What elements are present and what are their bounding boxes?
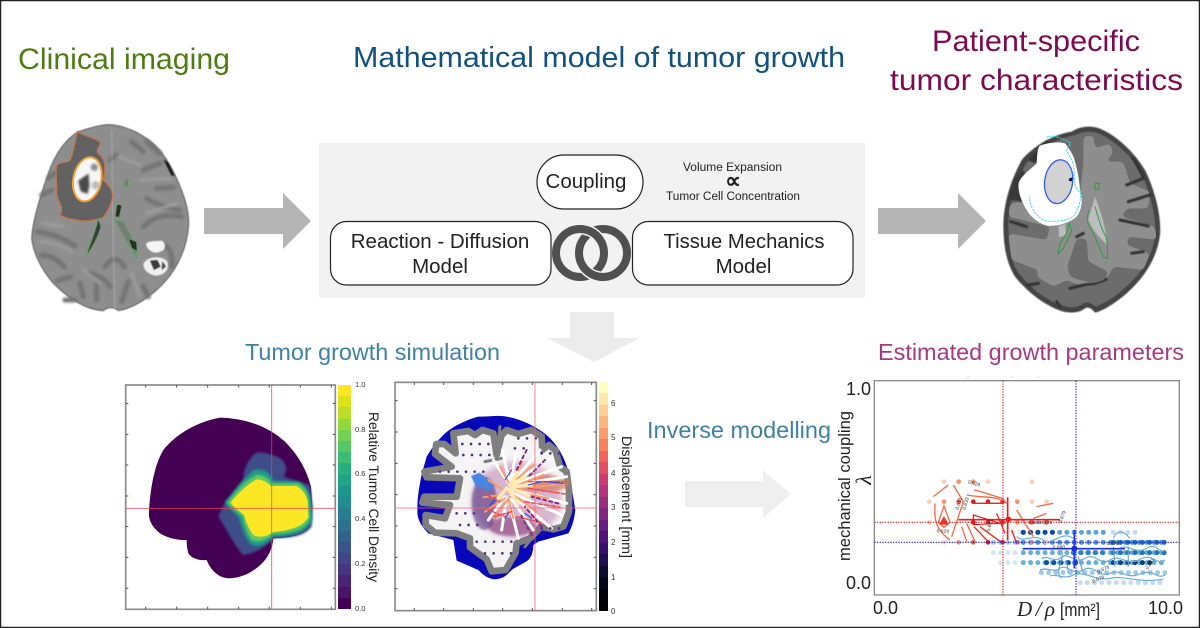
image: clinical brain MRI <box>32 125 189 311</box>
coupling box <box>537 155 643 209</box>
tumor core yellow <box>231 479 308 537</box>
y axis title: mechanical coupling <box>835 411 854 561</box>
contour labels: 0.681 <box>1145 557 1156 571</box>
arrow: model to characteristics <box>878 193 986 249</box>
y axis tick labels <box>846 379 871 593</box>
edema contour <box>1029 136 1080 221</box>
proportionality note <box>666 162 800 203</box>
colorbar: viridis <box>338 385 351 609</box>
contour labels <box>937 479 1156 585</box>
colorbar title: Displacement [mm] <box>619 436 635 558</box>
coupling box: Coupling <box>546 170 626 193</box>
colorbar tick labels: 3 <box>611 503 616 512</box>
reaction-diffusion box: Model <box>412 255 468 278</box>
colorbar tick labels: 6 <box>611 399 616 408</box>
reference lines <box>874 381 1179 595</box>
panel: mathematical model <box>319 143 865 298</box>
colorbar tick labels: 4 <box>611 469 616 478</box>
colorbar tick labels: 0 <box>611 607 616 616</box>
tumor core <box>69 155 106 204</box>
edema outline <box>56 132 113 221</box>
colorbar tick labels: 0.2 <box>355 559 365 568</box>
metastases <box>143 241 168 276</box>
tumor core <box>1042 158 1076 205</box>
x axis tick labels: 0.0 <box>873 598 898 618</box>
brain mass <box>149 418 312 578</box>
ventricle patch <box>471 473 496 491</box>
faint top marks <box>967 375 1041 379</box>
tissue mechanics box: Model <box>716 255 771 278</box>
dark blue points <box>1023 532 1165 583</box>
x axis title: D / ρ <box>1016 597 1055 621</box>
blue estimate <box>1023 530 1125 568</box>
image: segmented brain <box>1003 127 1160 313</box>
title: mathematical model: Mathematical model of tumor growth <box>353 42 845 74</box>
contour labels: 0.678 <box>1107 541 1119 547</box>
colorbar tick labels: 1.0 <box>355 380 365 389</box>
colorbar tick labels <box>355 380 365 613</box>
chart: estimated parameters <box>835 377 1183 621</box>
proportionality note: Volume Expansion <box>683 162 782 174</box>
contour labels: 0.629 <box>937 529 949 535</box>
white matter <box>1008 135 1157 287</box>
reaction-diffusion box <box>330 222 551 285</box>
y axis tick labels: 0.0 <box>846 573 871 593</box>
heading: estimated growth parameters: Estimated growth parameters <box>878 339 1184 365</box>
colorbar tick labels: 0.0 <box>355 604 365 613</box>
ventricle contours <box>1058 183 1108 258</box>
arrow: down to simulation <box>547 312 640 362</box>
ventricle <box>1088 197 1107 245</box>
tumor region <box>1018 143 1082 226</box>
colorbar tick labels: 0.8 <box>355 425 365 434</box>
tumor deformation underlay <box>472 462 562 538</box>
light blue points <box>993 522 1165 583</box>
colorbar tick labels: 0.4 <box>355 514 365 523</box>
sulcal gray <box>485 427 532 547</box>
chart: tumor cell density <box>126 380 382 613</box>
red contours <box>933 485 1053 542</box>
red estimate <box>958 497 1060 540</box>
title: patient-specific tumor characteristics: Patient-specific <box>932 25 1140 58</box>
contour labels: 0.680 <box>1053 544 1065 550</box>
pale red points <box>929 482 1047 542</box>
proportionality note: ∝ <box>725 168 741 193</box>
crosshair <box>395 382 596 611</box>
x axis tick labels <box>873 598 1183 618</box>
central gray block <box>1067 238 1108 283</box>
title: patient-specific tumor characteristics: tumor characteristics <box>890 64 1183 97</box>
contour labels: 0.679 <box>1058 510 1068 524</box>
colorbar tick labels <box>611 399 616 616</box>
contour labels: 0.629 <box>967 479 981 489</box>
contour labels: 0.633 <box>962 497 971 511</box>
x axis tick labels: 10.0 <box>1148 598 1183 618</box>
white matter with gray cortex <box>422 430 569 571</box>
chart: displacement <box>395 382 635 616</box>
blue contours <box>1017 532 1165 580</box>
arrow: inverse modelling <box>685 470 791 518</box>
contour labels: 0.678 <box>1040 520 1053 526</box>
white matter dots <box>440 438 562 553</box>
colorbar tick labels: 5 <box>611 433 616 442</box>
heading: inverse modelling: Inverse modelling <box>647 417 831 443</box>
lambda symbol: λ <box>851 475 876 486</box>
brain outer: blue <box>417 416 575 579</box>
colorbar title: Relative Tumor Cell Density <box>366 412 382 582</box>
proportionality note: Tumor Cell Concentration <box>666 191 800 203</box>
icon: interlocked rings <box>556 229 627 277</box>
tissue mechanics box <box>632 222 853 285</box>
colorbar tick labels: 1 <box>611 573 616 582</box>
tissue mechanics box: Tissue Mechanics <box>664 230 824 253</box>
title: patient-specific tumor characteristics <box>890 25 1183 97</box>
reaction-diffusion box: Reaction - Diffusion <box>351 230 529 253</box>
ventricles <box>86 179 138 258</box>
tumor density layers <box>218 452 313 555</box>
contour labels: 0.631 <box>955 497 964 511</box>
displacement vectors <box>483 448 567 538</box>
ticks <box>395 382 596 611</box>
contour labels: 0.649 <box>1028 520 1041 526</box>
contour labels: 0.678 <box>1092 574 1106 585</box>
y axis tick labels: 1.0 <box>846 379 871 399</box>
x axis title <box>1016 597 1100 621</box>
crosshair <box>126 385 335 609</box>
colorbar: magma <box>599 382 608 611</box>
ticks <box>126 385 335 609</box>
arrow: imaging to model <box>204 193 311 249</box>
contour labels: 0.637 <box>986 518 994 532</box>
contour labels: 0.678 <box>1097 564 1111 575</box>
colorbar tick labels: 2 <box>611 538 616 547</box>
colorbar tick labels: 0.6 <box>355 469 365 478</box>
title: clinical imaging: Clinical imaging <box>18 43 230 76</box>
x axis title: [mm²] <box>1060 600 1100 620</box>
heading: tumor growth simulation: Tumor growth simulation <box>245 339 500 365</box>
